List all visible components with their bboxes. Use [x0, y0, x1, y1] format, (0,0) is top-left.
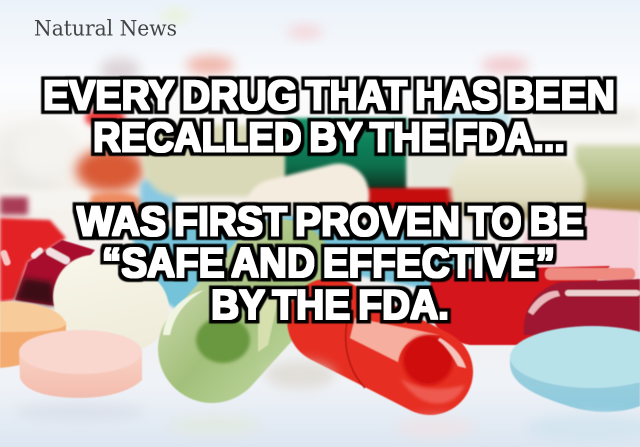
- blue capsule, back: [130, 215, 490, 320]
- headline line 2: RECALLED BY THE FDA...: [93, 114, 565, 160]
- red left capsule: [0, 218, 66, 302]
- green capsule: [136, 197, 357, 425]
- headline line 5: BY THE FDA.: [211, 281, 449, 328]
- blurred distant pills: [0, 10, 640, 224]
- blurred green capsule: [143, 125, 303, 197]
- dark red left capsule: [15, 240, 95, 306]
- highlight on red capsule: [0, 249, 11, 267]
- orange tablet: [0, 302, 66, 368]
- red front capsule: [272, 263, 488, 430]
- headline line 1: EVERY DRUG THAT HAS BEEN: [43, 72, 615, 118]
- cream capsule, back: [239, 157, 376, 248]
- headline line 3: WAS FIRST PROVEN TO BE: [77, 198, 584, 244]
- headline: [43, 72, 615, 328]
- headline line 4: “SAFE AND EFFECTIVE”: [102, 239, 555, 286]
- dark red capsule: [524, 279, 640, 336]
- reflections on table: [15, 361, 640, 442]
- brand label: Natural News: [34, 16, 177, 40]
- blurred pale block: [408, 145, 468, 190]
- blurred dark green capsule: [285, 118, 407, 192]
- blue tablet: [510, 326, 640, 412]
- blurred red capsule: [365, 188, 455, 218]
- blurred beige capsule: [450, 157, 585, 219]
- pink tablet: [19, 330, 142, 398]
- blurred olive capsule: [575, 145, 640, 213]
- cream capsule, front: [41, 243, 181, 363]
- pink capsule, back: [523, 208, 640, 280]
- red middle capsule: [429, 266, 635, 345]
